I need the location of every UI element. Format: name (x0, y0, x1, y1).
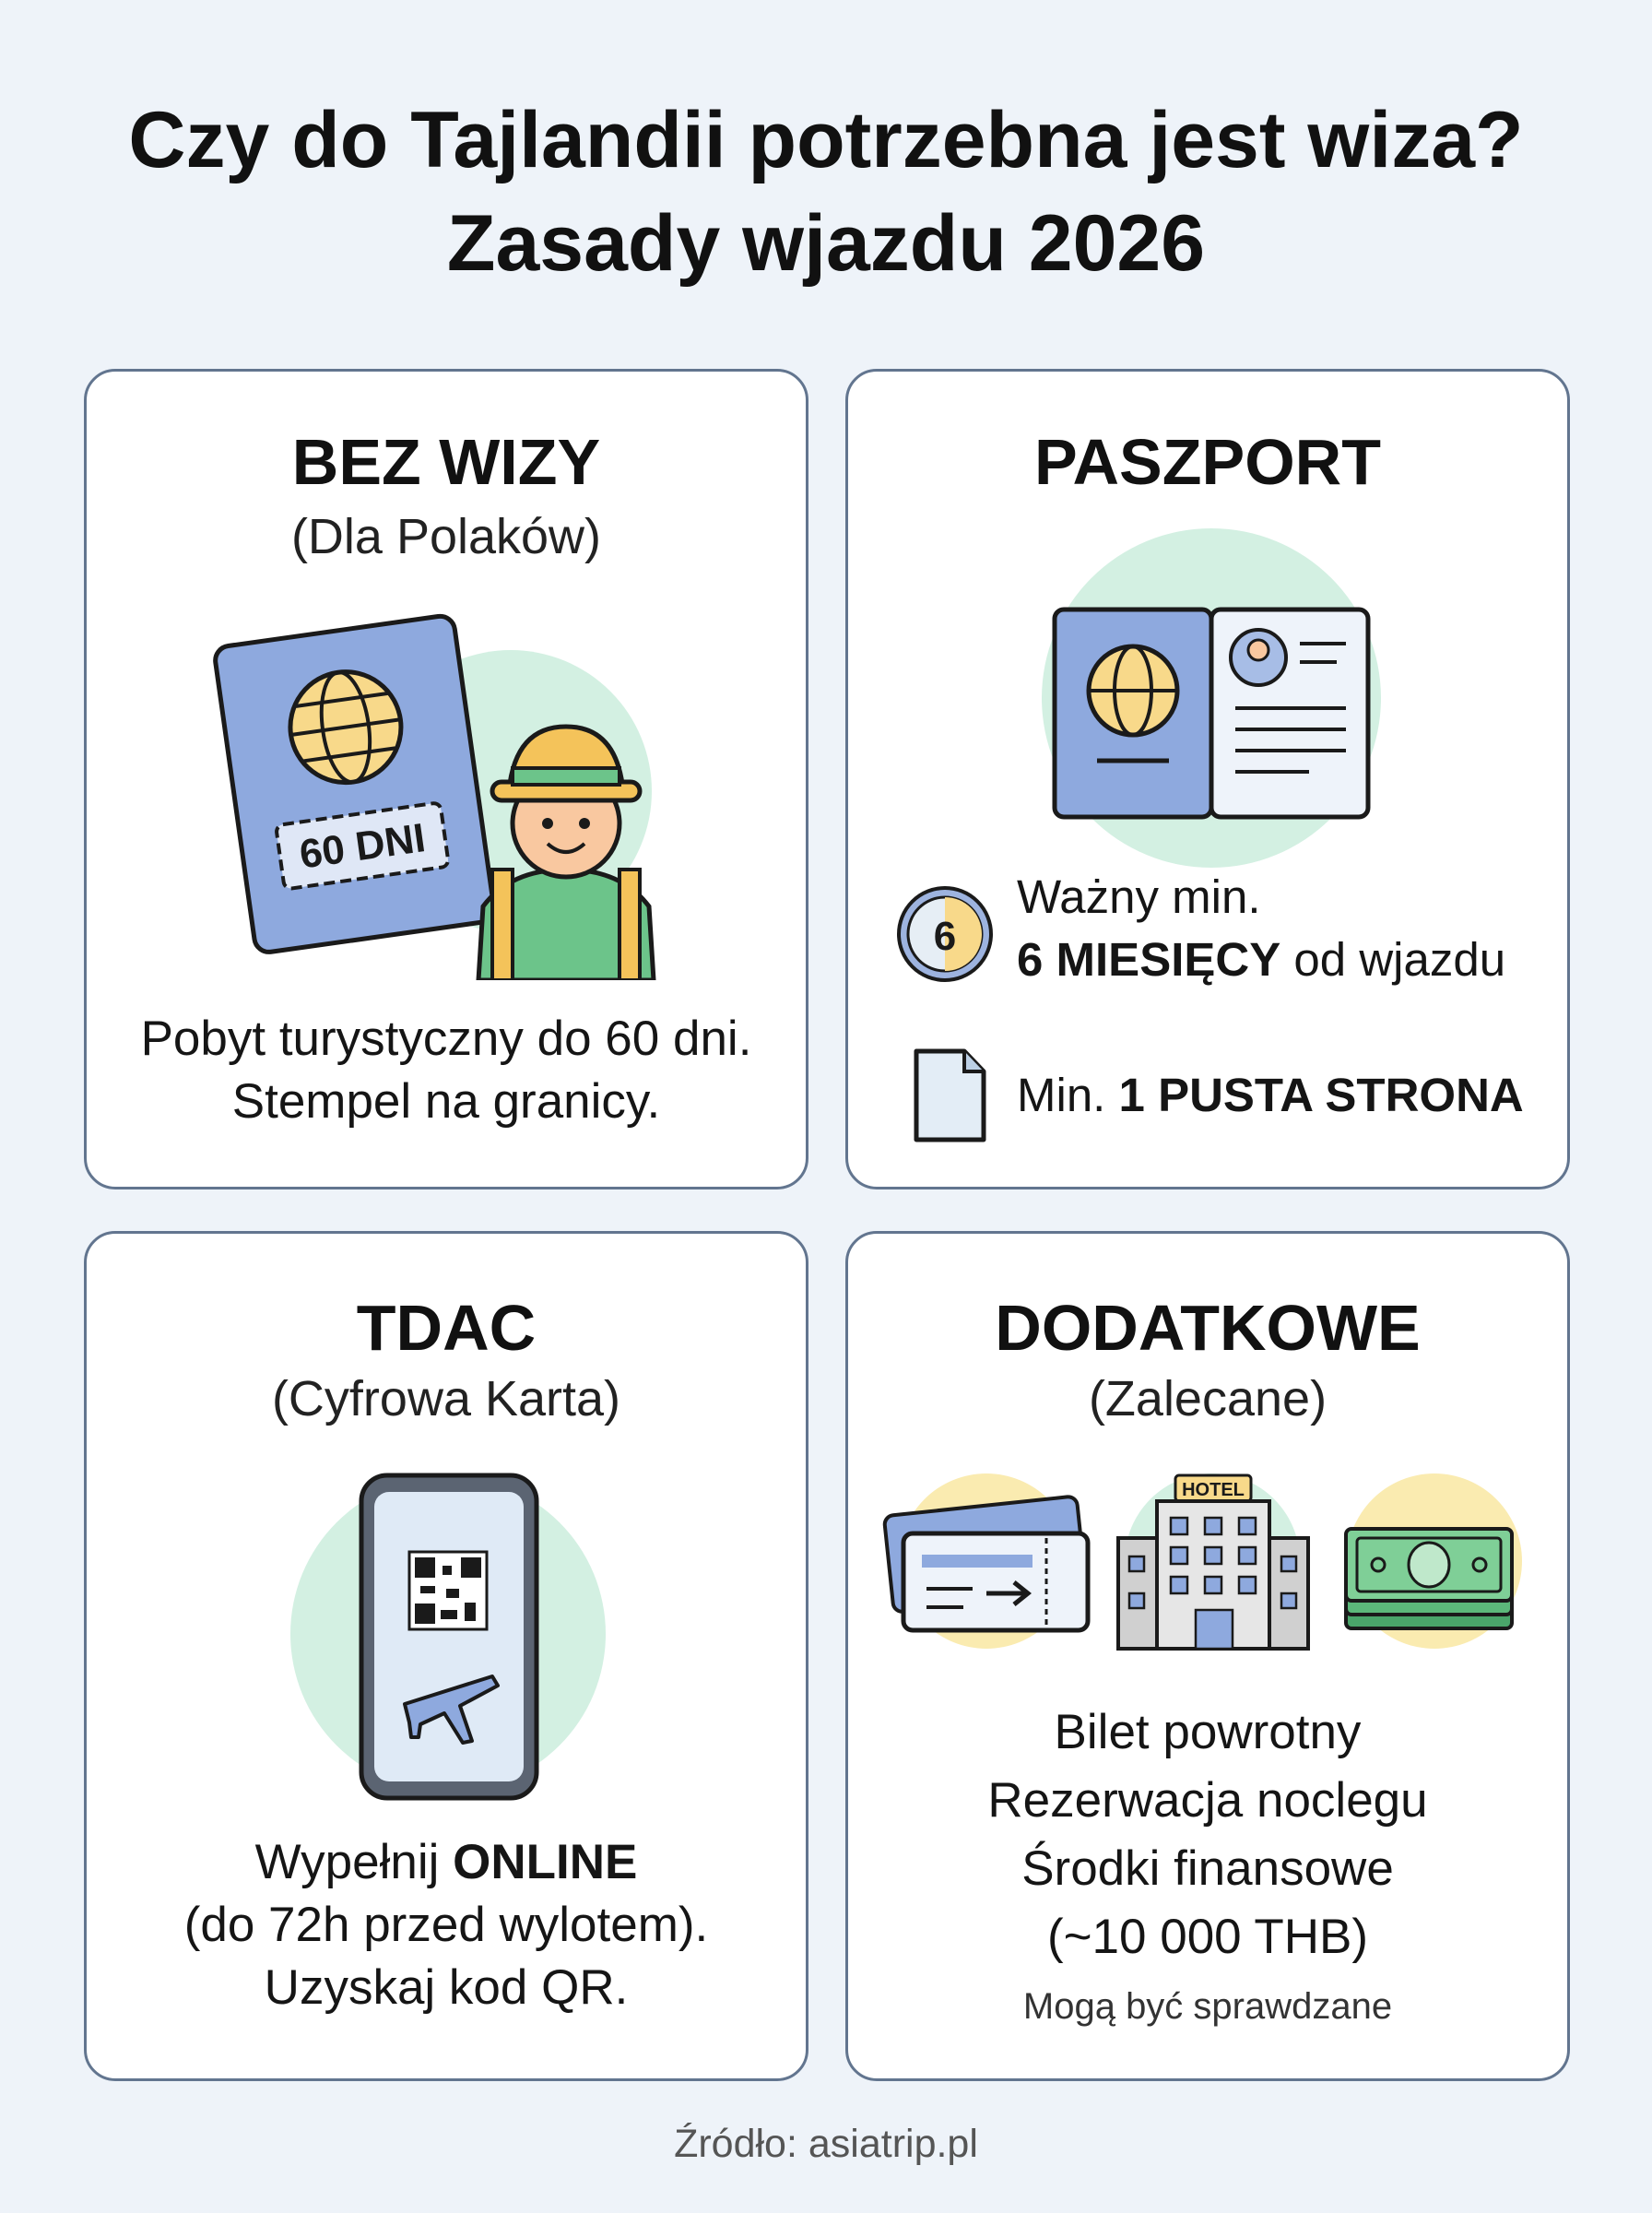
text: validity: Ważny min. (1017, 870, 1261, 923)
icon: clock (897, 886, 993, 982)
text: empty page: Min. 1 PUSTA STRONA (1017, 1069, 1524, 1121)
title: Czy do Tajlandii potrzebna jest wiza? (128, 96, 1524, 184)
heading: PASZPORT (1034, 426, 1381, 498)
description: Wypełnij ONLINE (255, 1835, 637, 1889)
list (987, 1705, 1428, 1964)
heading: TDAC (357, 1292, 536, 1364)
illustration: phone with QR (290, 1473, 606, 1800)
description: (do 72h przed wylotem). (184, 1898, 708, 1952)
description: Uzyskaj kod QR. (265, 1960, 628, 2015)
illustration: open passport (1042, 528, 1381, 868)
illustration: passport and traveler (213, 614, 656, 980)
panel: dodatkowe (845, 1231, 1570, 2081)
subheading: (Dla Polaków) (291, 509, 601, 564)
description: Pobyt turystyczny do 60 dni. (141, 1012, 751, 1066)
icon: page (914, 1049, 986, 1142)
panel: tdac (84, 1231, 808, 2081)
heading: BEZ WIZY (292, 426, 600, 498)
icon: clock: 6 (934, 914, 956, 959)
heading: DODATKOWE (995, 1292, 1421, 1364)
icons: ticket, hotel, money: HOTEL (1182, 1480, 1245, 1500)
subheading: (Cyfrowa Karta) (272, 1371, 620, 1426)
list: Środki finansowe (1021, 1841, 1394, 1896)
description (141, 1012, 751, 1129)
description (184, 1835, 708, 2015)
illustration: passport and traveler: 60 DNI (297, 815, 428, 878)
note: Mogą być sprawdzane (1023, 1986, 1392, 2027)
source: Źródło: asiatrip.pl (674, 2122, 978, 2166)
list: (~10 000 THB) (1047, 1910, 1368, 1964)
list: Bilet powrotny (1055, 1705, 1361, 1759)
text: validity: 6 MIESIĘCY od wjazdu (1017, 933, 1505, 986)
icons: ticket, hotel, money (883, 1473, 1522, 1651)
panel: paszport (845, 369, 1570, 1189)
subheading: (Zalecane) (1089, 1371, 1327, 1426)
description: Stempel na granicy. (232, 1074, 660, 1129)
panel: bez wizy (84, 369, 808, 1189)
text: validity (1017, 870, 1505, 986)
title: Zasady wjazdu 2026 (447, 199, 1205, 288)
list: Rezerwacja noclegu (987, 1773, 1428, 1828)
title (128, 96, 1524, 288)
